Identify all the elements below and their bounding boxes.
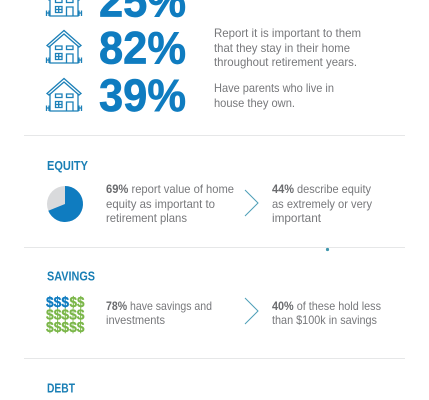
arrow: savings xyxy=(245,298,258,324)
text: parents: Have parents who live in xyxy=(214,81,334,95)
text: 44% equity xyxy=(272,182,372,225)
text: parents: house they own. xyxy=(214,96,295,110)
stat: 39%: 39% xyxy=(99,70,186,121)
text: 78% savings: investments xyxy=(106,313,165,327)
text: 69% equity: equity as important to xyxy=(106,197,215,211)
text: stay in home: throughout retirement years. xyxy=(214,55,357,69)
text: 44% equity: 44% describe equity xyxy=(272,182,371,196)
text: 40% savings: than $100k in savings xyxy=(272,313,377,327)
text: stay in home xyxy=(214,26,361,69)
stat: 82%: 82% xyxy=(99,22,186,74)
icon: dollar signs xyxy=(46,294,85,336)
heading: savings: SAVINGS xyxy=(47,268,95,284)
text: stay in home: that they stay in their home xyxy=(214,41,350,55)
icon: dollar signs: $$$$$ xyxy=(46,306,85,324)
icon: house 25% xyxy=(46,0,82,16)
text: 44% equity: as extremely or very xyxy=(272,197,372,211)
text: 44% equity: important xyxy=(272,211,322,225)
text: 78% savings xyxy=(106,299,212,327)
pie chart: 69% xyxy=(47,186,83,222)
icon: dollar signs: $$$ xyxy=(46,294,70,311)
arrow: equity xyxy=(245,190,258,216)
text: 78% savings: 78% have savings and xyxy=(106,299,212,313)
text: parents xyxy=(214,81,334,110)
icon: dollar signs: $$ xyxy=(70,294,85,311)
text: 69% equity: retirement plans xyxy=(106,211,187,225)
icon: dollar signs: $$$$$ xyxy=(46,319,85,336)
text: 69% equity xyxy=(106,182,234,225)
icon: house 82% xyxy=(46,30,82,63)
text: 40% savings xyxy=(272,299,381,327)
text: stay in home: Report it is important to them xyxy=(214,26,361,40)
icon: house 39% xyxy=(46,78,82,111)
heading: debt: DEBT xyxy=(47,380,75,396)
heading: equity: EQUITY xyxy=(47,158,88,173)
text: 69% equity: 69% report value of home xyxy=(106,182,234,196)
text: 40% savings: 40% of these hold less xyxy=(272,299,381,313)
